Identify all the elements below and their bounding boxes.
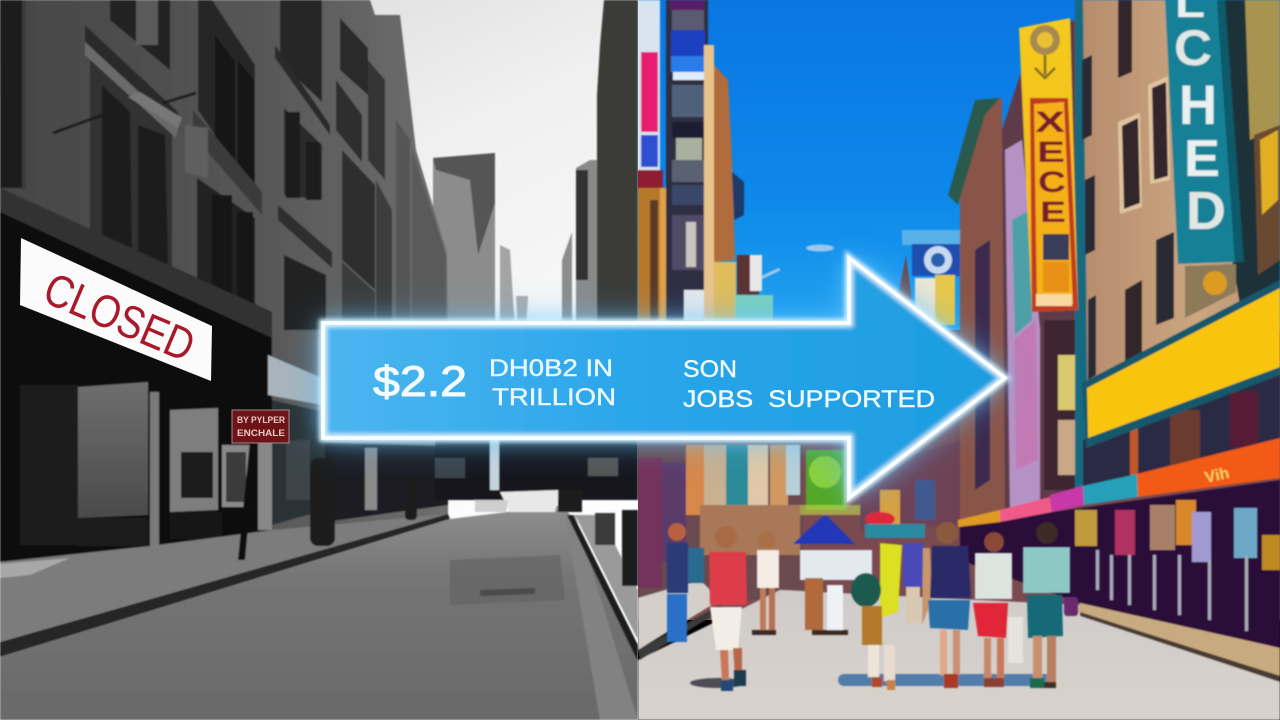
- small red street sign: ENCHALE: [237, 428, 285, 438]
- distant buildings: [433, 0, 638, 330]
- person in pale blue: [1023, 522, 1078, 688]
- teal vertical sign: C: [1174, 20, 1212, 76]
- sidewalk: [0, 514, 450, 657]
- label: SON JOBS SUPPORTED: SON: [683, 356, 737, 383]
- window group four: [336, 18, 446, 330]
- closed sign: [20, 238, 212, 381]
- person in red: [709, 526, 747, 691]
- road: [0, 505, 638, 720]
- window group three: [275, 0, 332, 330]
- market tents: [793, 505, 925, 544]
- left building facades: [0, 0, 448, 560]
- teal vertical sign: D: [1186, 181, 1226, 241]
- yellow vertical banner: E: [1040, 196, 1066, 229]
- tall tan building: [1075, 0, 1280, 490]
- shopfront: [0, 188, 448, 562]
- blue-shirt person behind: [903, 543, 923, 623]
- person with yellow jacket: [851, 543, 902, 690]
- mid-right buildings: [860, 20, 1082, 530]
- closed sign: CLOSED: [37, 262, 202, 372]
- shadows on road: [690, 674, 1054, 688]
- label: DH0B2 IN TRILLION: [489, 355, 616, 411]
- label: DH0B2 IN TRILLION: TRILLION: [492, 384, 616, 411]
- statistic: $2.2: $2.2: [373, 358, 467, 406]
- panel: closed black-and-white street: [0, 0, 638, 720]
- label: SON JOBS SUPPORTED: [683, 356, 935, 413]
- person in navy top: [922, 522, 971, 688]
- window group one: [53, 0, 196, 270]
- window group two: [185, 0, 262, 318]
- colourful awning strip: Vih: [1203, 465, 1231, 487]
- arrow halo: [323, 258, 1005, 498]
- panel: vibrant colourful street: [637, 0, 1280, 720]
- teal vertical sign: [1165, 0, 1244, 264]
- small red street sign: BY PYLPER: [237, 415, 285, 425]
- big arrow with statistics: [323, 258, 1005, 498]
- label: SON JOBS SUPPORTED: JOBS SUPPORTED: [683, 386, 935, 413]
- yellow vertical banner: [1019, 18, 1078, 312]
- road: [638, 580, 1280, 720]
- teal vertical sign: H: [1179, 73, 1217, 136]
- yellow storefront awning: [1082, 280, 1280, 448]
- teal vertical sign: E: [1184, 130, 1220, 188]
- store level: [960, 372, 1280, 650]
- yellow vertical banner: C: [1038, 166, 1066, 199]
- wide blue glow around arrow: [323, 258, 1005, 498]
- street furniture: [238, 440, 638, 586]
- yellow vertical banner: X: [1035, 106, 1065, 139]
- yellow vertical banner: E: [1037, 136, 1065, 169]
- left-side buildings: [637, 0, 834, 330]
- colourful awning strip: [958, 438, 1280, 527]
- label: DH0B2 IN TRILLION: DH0B2 IN: [489, 355, 613, 382]
- pedestrian crowd: [667, 522, 1078, 691]
- person far left: [667, 523, 704, 642]
- person in white: [752, 531, 779, 635]
- pair at centre: [800, 550, 872, 635]
- person in red skirt: [973, 532, 1023, 687]
- left shops under arrow: [638, 440, 846, 600]
- distant right signs: [897, 230, 960, 325]
- small red street sign: [232, 410, 289, 443]
